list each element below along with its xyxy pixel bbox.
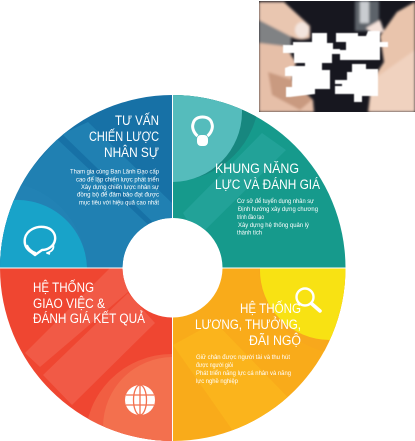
body text: Định hướng xây dựng chương — [238, 207, 318, 213]
panel: teal quadrant, khung năng lực và đánh giá — [173, 95, 346, 268]
puzzle pieces — [283, 31, 388, 102]
icon: speech bubbles — [25, 227, 55, 255]
panel: red quadrant, hệ thống giao việc và đánh giá kết quả — [0, 268, 173, 441]
title — [89, 113, 159, 160]
body text: cao để lập chiến lược phát triển — [76, 176, 159, 183]
body text — [196, 355, 291, 385]
title — [215, 161, 320, 192]
body text — [70, 169, 160, 206]
title: HỆ THỐNG — [33, 280, 94, 295]
icon: globe — [125, 385, 155, 415]
body text: mục tiêu với hiệu quả cao nhất — [79, 200, 159, 206]
body text — [237, 198, 318, 236]
title: TƯ VẤN — [115, 113, 159, 128]
title: KHUNG NĂNG — [215, 161, 299, 176]
panel: blue quadrant, tư vấn chiến lược nhân sự — [0, 95, 173, 268]
body text: đồng bộ để đảm bảo đạt được — [77, 192, 159, 199]
body text: Xây dựng chiến lược nhân sự — [81, 185, 159, 191]
panel: orange quadrant, hệ thống lương thưởng đãi ngộ — [173, 268, 346, 441]
body text: trình đào tạo — [237, 215, 265, 221]
body text: Tham gia cùng Ban Lãnh Đạo cấp — [70, 169, 160, 175]
title: ĐÃI NGỘ — [249, 333, 301, 348]
title: HỆ THỐNG — [240, 301, 301, 316]
photo: hands joining puzzle pieces — [259, 1, 415, 112]
title: CHIẾN LƯỢC — [89, 129, 159, 144]
title: NHÂN SỰ — [104, 145, 159, 160]
body text: Phát triển năng lực cá nhân và năng — [196, 370, 291, 377]
body text: Xây dựng hệ thống quản lý — [238, 223, 309, 229]
title — [33, 280, 145, 326]
body text: được người giỏi — [196, 362, 233, 369]
title: LỰC VÀ ĐÁNH GIÁ — [215, 177, 320, 192]
title: LƯƠNG, THƯỞNG, — [195, 317, 301, 332]
title: ĐÁNH GIÁ KẾT QUẢ — [33, 311, 145, 326]
body text: Giữ chân được người tài và thu hút — [196, 355, 290, 361]
title — [195, 301, 301, 348]
body text: lực nghề nghiệp — [196, 379, 239, 385]
body text: thành tích — [237, 230, 262, 236]
icon: light bulb — [193, 117, 212, 146]
title: GIAO VIỆC & — [33, 296, 105, 311]
body text: Cơ sở để tuyển dụng nhân sự — [237, 198, 314, 205]
icon: magnifying glass — [296, 288, 320, 311]
